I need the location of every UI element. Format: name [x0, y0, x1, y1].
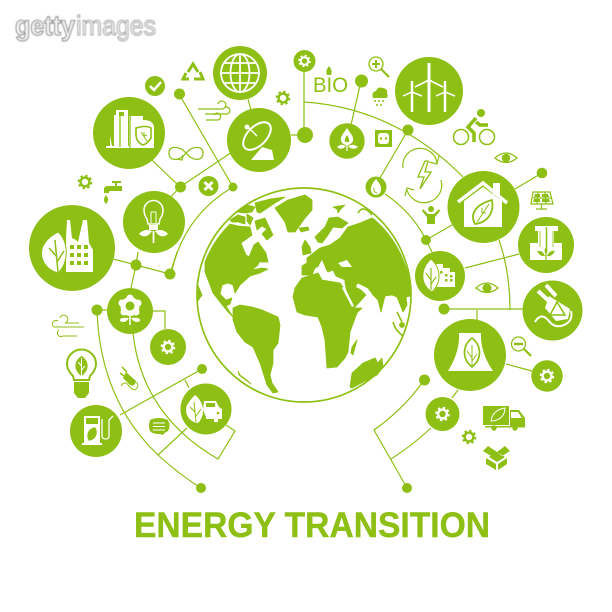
icon: water tap: [104, 181, 122, 204]
icon: wind turbines: [395, 57, 463, 125]
icon: solar panel: [531, 192, 553, 209]
icon: magnifier plus: [369, 57, 389, 77]
icon: gear node right: [531, 360, 563, 392]
icon: leaf bulb: [67, 350, 96, 398]
icon: small plug: [120, 367, 138, 390]
icon: wind left: [52, 315, 84, 337]
icon: factory with leaf: [29, 205, 115, 291]
connector lines: [97, 70, 542, 488]
icon: house with leaf: [448, 171, 520, 243]
icon: magnifier minus: [512, 337, 531, 356]
icon: infinity loop: [169, 147, 203, 160]
icon: car with leaf: [180, 384, 232, 434]
icon: gear top: [277, 92, 289, 104]
icon: delivery truck: [483, 406, 525, 431]
junction dots: [92, 74, 547, 493]
icon: cooling tower: [434, 319, 506, 391]
icon: chat bubble: [149, 418, 170, 435]
icon: water drop node: [366, 176, 386, 198]
icon: gear node lower left: [150, 329, 186, 365]
icon: gear node bottom: [426, 397, 460, 431]
icon: open box: [483, 446, 510, 470]
icon: flame with leaves: [329, 123, 365, 159]
icon: light bulb with leaves: [123, 191, 185, 253]
watermark logo: images: [76, 10, 156, 41]
icon: energy cycle bolt: [403, 148, 442, 203]
icon: fuel pump: [70, 405, 122, 457]
inland seas: [319, 260, 371, 307]
icon: check badge: [145, 76, 165, 96]
icon: person arms up: [422, 206, 440, 224]
title: ENERGY TRANSITION: [134, 506, 490, 545]
icon: refinery tanks: [93, 97, 165, 169]
continents: [197, 195, 411, 393]
icon: satellite dish: [227, 108, 291, 172]
icon: cyclist: [454, 109, 494, 144]
icon: wind top: [198, 101, 230, 120]
icon: power plant with plant: [518, 217, 574, 273]
icon: eye lower: [476, 283, 498, 292]
icon: flower: [107, 288, 153, 334]
watermark logo: getty: [15, 10, 75, 41]
icon: green building with leaf: [415, 251, 465, 301]
icon: power socket: [375, 130, 392, 147]
icon: gear left: [79, 176, 91, 188]
icon: globe node: [213, 46, 267, 100]
icon: eye upper: [495, 153, 517, 162]
globe: [197, 188, 411, 402]
icon: bio label: BIO: [313, 74, 348, 97]
icon: gear lower: [463, 431, 475, 443]
icon: cross badge: [198, 176, 218, 196]
icon: recycle triangle: [183, 64, 203, 79]
watermark logo: [15, 10, 156, 41]
icon: gear node top: [294, 50, 316, 72]
icon: rain cloud: [372, 87, 388, 106]
icon: recycle plug: [522, 280, 582, 340]
